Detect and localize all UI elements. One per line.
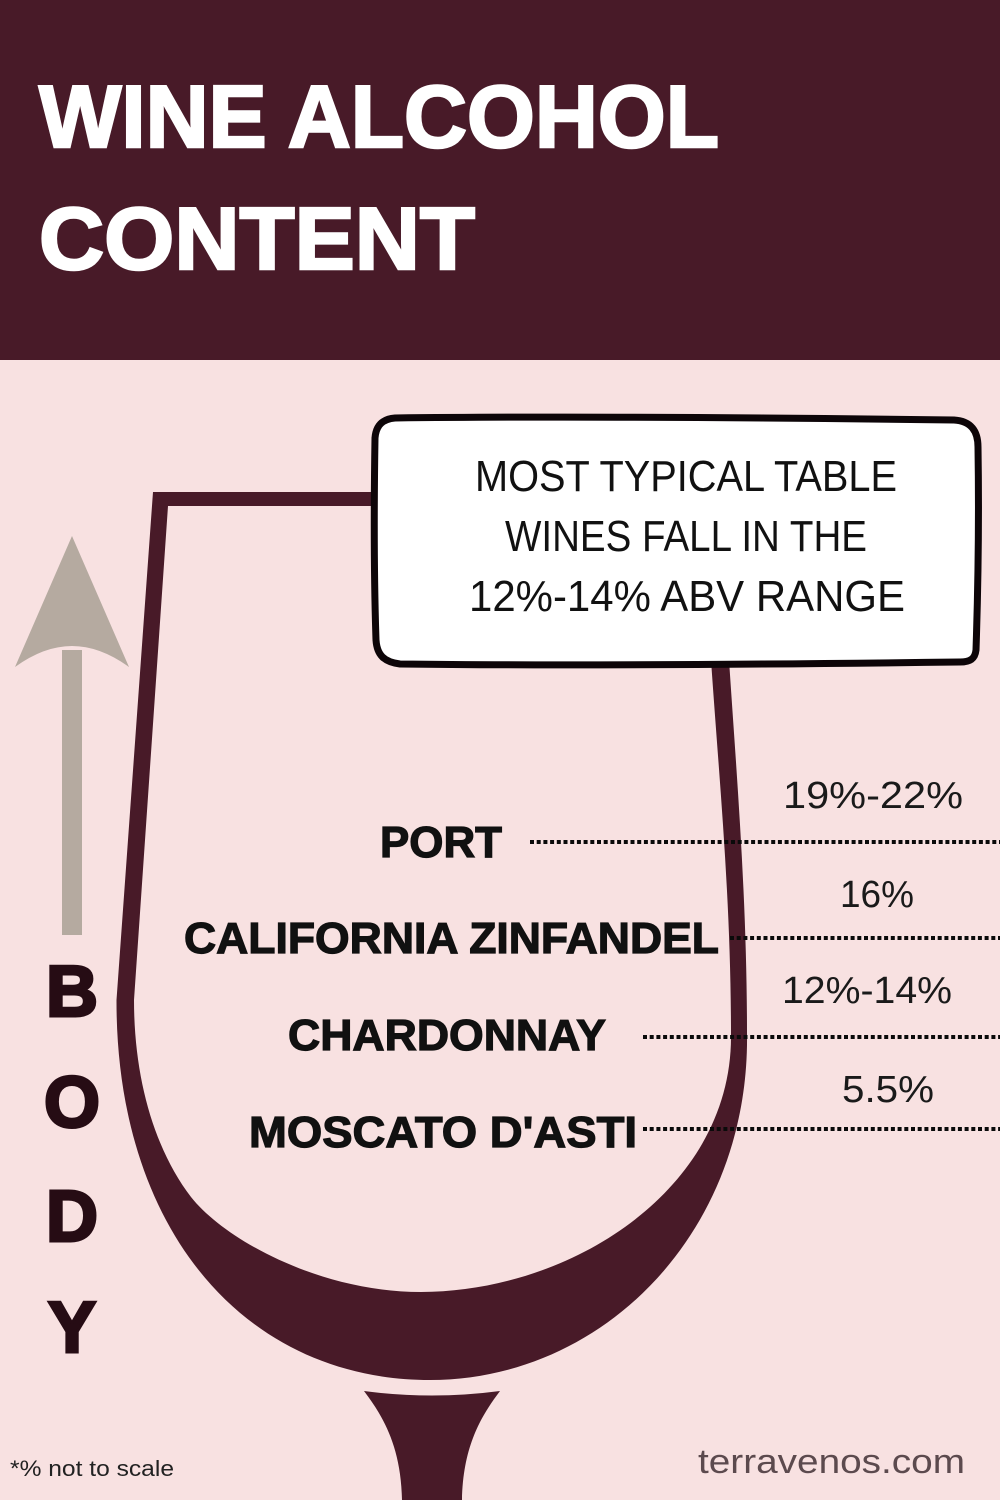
body label: O xyxy=(44,1063,100,1143)
body label: D xyxy=(46,1177,98,1257)
callout text: 12%-14% ABV RANGE xyxy=(469,572,905,621)
body label: Y xyxy=(48,1288,96,1368)
glass stem xyxy=(364,1391,500,1500)
callout text xyxy=(469,452,905,621)
percentages: 5.5% xyxy=(842,1069,934,1111)
body label xyxy=(44,952,100,1368)
wine labels xyxy=(184,818,719,1157)
body arrow xyxy=(15,536,129,935)
wine labels: CALIFORNIA ZINFANDEL xyxy=(184,914,719,963)
body label: B xyxy=(46,952,98,1032)
callout text: WINES FALL IN THE xyxy=(505,512,867,561)
callout text: MOST TYPICAL TABLE xyxy=(475,452,897,501)
title: WINE ALCOHOL xyxy=(39,67,719,166)
website credit: terravenos.com xyxy=(698,1443,965,1481)
percentages: 16% xyxy=(840,874,914,916)
percentages: 19%-22% xyxy=(783,775,963,817)
title: CONTENT xyxy=(39,189,475,288)
wine glass xyxy=(116,492,747,1500)
title xyxy=(39,67,719,288)
percentages xyxy=(782,775,963,1111)
wine labels: CHARDONNAY xyxy=(288,1011,606,1060)
footnote: *% not to scale xyxy=(10,1456,174,1481)
dotted leader lines xyxy=(530,842,1000,1129)
callout xyxy=(374,417,978,665)
wine labels: MOSCATO D'ASTI xyxy=(249,1108,637,1157)
percentages: 12%-14% xyxy=(782,970,952,1012)
wine labels: PORT xyxy=(380,818,502,867)
header banner xyxy=(0,0,1000,360)
